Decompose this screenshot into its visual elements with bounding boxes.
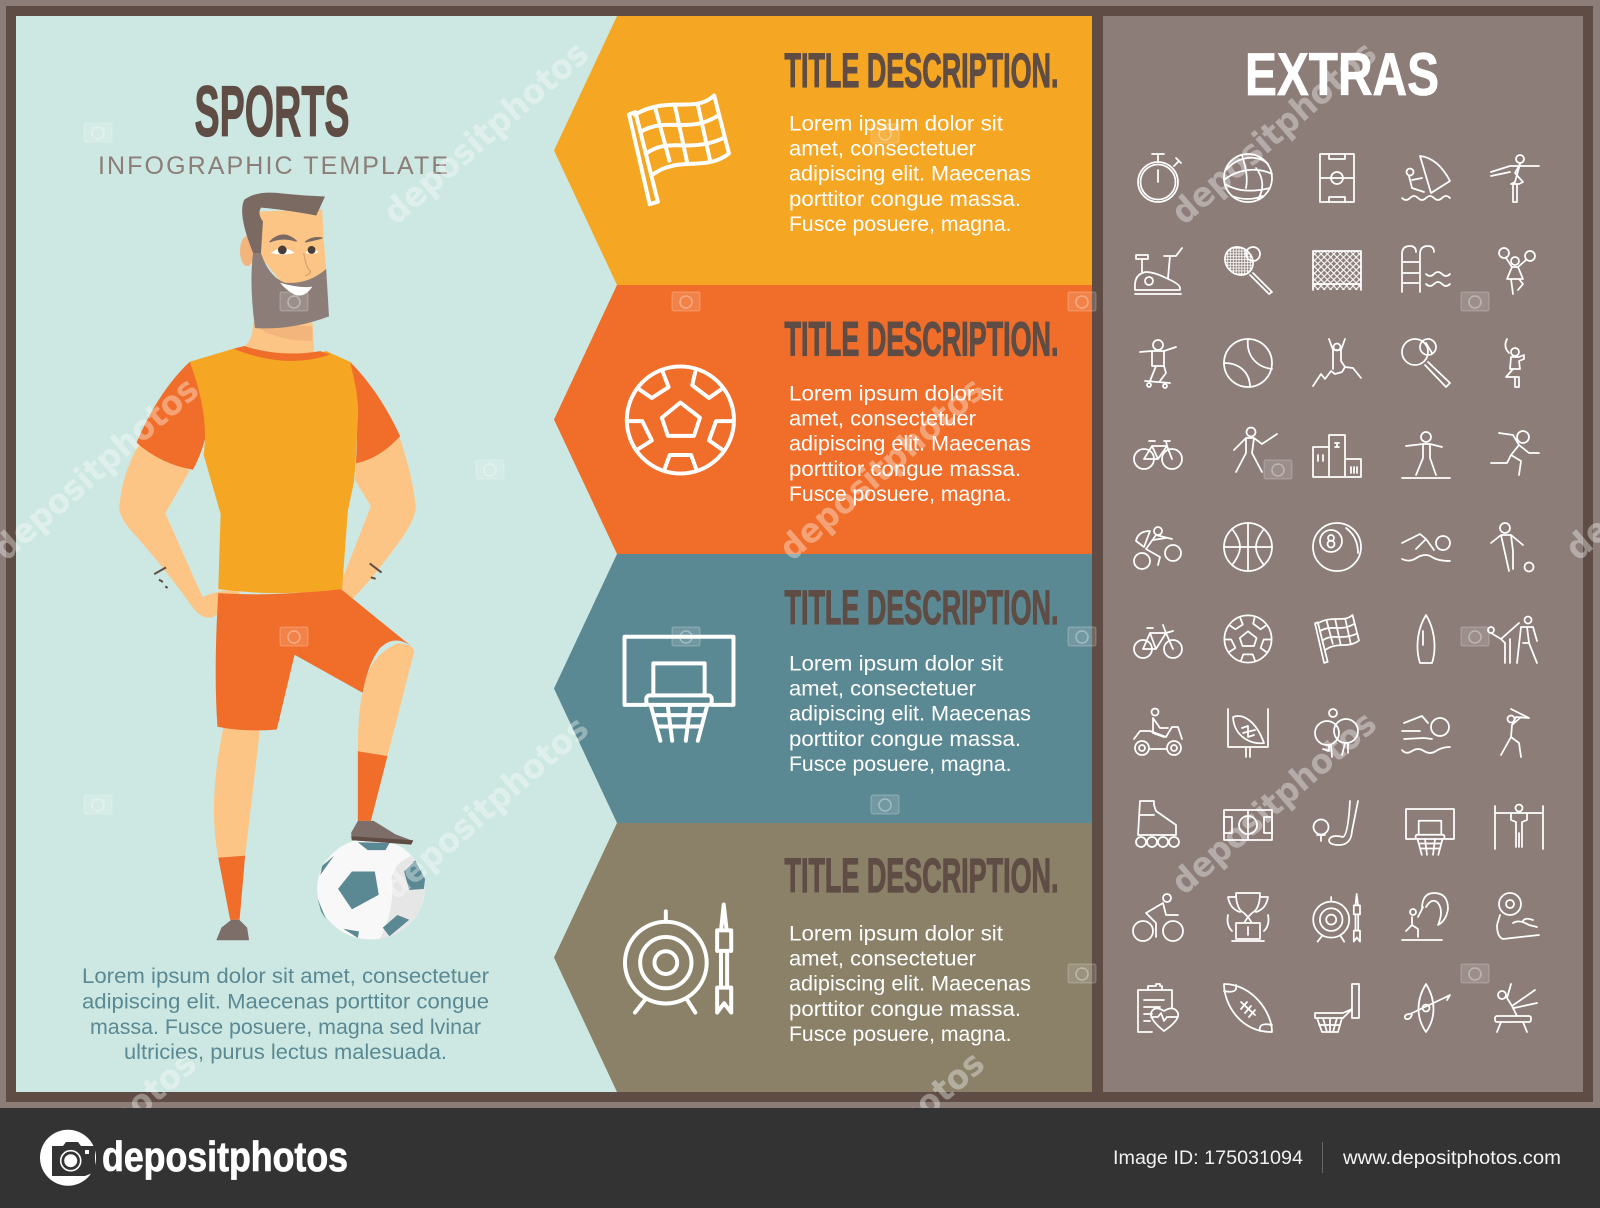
ball [317, 838, 425, 939]
icon: pull up bar athlete [1495, 804, 1543, 849]
text block: porttitor congue massa. [789, 728, 1021, 751]
head [240, 193, 329, 328]
icon: billiard eight ball [1313, 523, 1361, 571]
text block: Lorem ipsum dolor sit [789, 923, 1003, 946]
text block: adipiscing elit. Maecenas [789, 163, 1031, 186]
icon: karate fighters [1488, 616, 1537, 663]
icon: american football [1224, 984, 1272, 1032]
icon: archery target [1313, 894, 1360, 942]
panel: section 4 khaki [554, 823, 1092, 1092]
text block: amet, consectetuer [789, 948, 976, 971]
icon: rollerblade [1136, 801, 1179, 847]
watermarks: depositphotos [1164, 33, 1385, 233]
text block: adipiscing elit. Maecenas [789, 973, 1031, 996]
heading: TITLE DESCRIPTION. [784, 314, 1058, 366]
icon: winners podium [1313, 435, 1361, 477]
neck [244, 322, 314, 354]
icon: basketball hoop [625, 637, 733, 741]
icon: bicycle [1134, 441, 1182, 469]
icon: soccer ball [627, 366, 734, 474]
icon: soccer field horizontal [1224, 810, 1272, 840]
text block: porttitor congue massa. [789, 188, 1021, 211]
watermarks: depositphotos [376, 708, 597, 908]
icon: skateboarder [1140, 340, 1176, 388]
text block [789, 653, 1031, 776]
icon: cheerleader [1499, 248, 1535, 294]
text block: Fusce posuere, magna. [789, 213, 1012, 236]
illustration: football player with ball [119, 193, 425, 940]
icon: football goal [1228, 709, 1268, 757]
description paragraph [82, 964, 489, 1064]
text block: Lorem ipsum dolor sit [789, 383, 1003, 406]
icon: swimmer [1402, 534, 1450, 561]
text block: Fusce posuere, magna. [789, 1023, 1012, 1046]
description paragraph: Lorem ipsum dolor sit amet, consectetuer [82, 964, 489, 988]
panel: section 1 yellow [554, 16, 1092, 285]
icon: mountain cyclist [1134, 527, 1181, 569]
text block: Lorem ipsum dolor sit [789, 113, 1003, 136]
icon: mountain climber [1313, 339, 1361, 386]
icon: ping pong paddles [1315, 709, 1358, 757]
icon: kitesurfer [1402, 893, 1448, 940]
website url: www.depositphotos.com [1342, 1147, 1561, 1169]
text block: adipiscing elit. Maecenas [789, 703, 1031, 726]
panel: section 2 orange [554, 285, 1092, 554]
icon: city bicycle [1134, 625, 1182, 658]
icon: arm with weight [1497, 893, 1539, 939]
icon: gymnast dancer [1505, 339, 1524, 387]
icon: swimming pool ladder [1402, 246, 1450, 292]
panel: left sports hero [16, 16, 656, 1092]
icon: soccer field [1320, 154, 1354, 202]
icon: soccer ball [1224, 615, 1272, 663]
logo: camera badge [40, 1130, 96, 1186]
icon: ballet dancer [1491, 155, 1539, 202]
title: sports: SPORTS [194, 73, 350, 152]
text block [789, 383, 1031, 506]
heading: TITLE DESCRIPTION. [784, 582, 1058, 635]
watermarks: depositphotos [772, 369, 993, 569]
icon: footballer kicking [1491, 523, 1534, 572]
text block [789, 113, 1031, 236]
heading: extras: EXTRAS [1245, 41, 1439, 108]
icon: gymnast on pommel horse [1495, 984, 1537, 1032]
text block: Fusce posuere, magna. [789, 483, 1012, 506]
watermarks: depositphotos [1164, 703, 1385, 903]
icon: tennis ball [1224, 339, 1272, 387]
heading: TITLE DESCRIPTION. [784, 45, 1058, 98]
icon: basketball hoop [1406, 809, 1454, 855]
icon: road cyclist [1133, 894, 1183, 941]
text block: amet, consectetuer [789, 678, 976, 701]
icon: trophy [1228, 893, 1268, 941]
text block: porttitor congue massa. [789, 998, 1021, 1021]
icon: checkered flag [629, 96, 729, 204]
text block: amet, consectetuer [789, 408, 976, 431]
text block: amet, consectetuer [789, 138, 976, 161]
icon: kayak [1405, 984, 1450, 1032]
icon: surfer [1402, 432, 1450, 478]
icon: goal net [1313, 251, 1361, 290]
description paragraph: massa. Fusce posuere, magna sed lvinar [90, 1015, 481, 1039]
text block: Lorem ipsum dolor sit [789, 653, 1003, 676]
logo wordmark: depositphotos [102, 1133, 348, 1180]
icon: medical clipboard [1138, 984, 1178, 1032]
icon: windsurfer [1402, 156, 1450, 200]
panel: extras icons [1103, 16, 1583, 1092]
icon: stopwatch [1138, 154, 1181, 202]
text block [789, 923, 1031, 1046]
watermarks: depositphotos [376, 33, 597, 233]
shirt [136, 346, 400, 593]
icon: checkered flag [1315, 615, 1359, 663]
description paragraph: adipiscing elit. Maecenas porttitor congue [82, 990, 489, 1014]
text block: porttitor congue massa. [789, 458, 1021, 481]
legs [214, 643, 414, 940]
footer bar [0, 1108, 1600, 1208]
icon: surfboard [1418, 615, 1434, 663]
icon: exercise bike [1135, 248, 1182, 294]
icon: table tennis racket [1402, 339, 1450, 387]
icon: quad bike [1134, 708, 1182, 755]
panel: section 3 teal [554, 554, 1092, 823]
icon: volleyball [1224, 154, 1272, 202]
text block: adipiscing elit. Maecenas [789, 433, 1031, 456]
icon: basketball backboard side [1315, 984, 1359, 1032]
subtitle: INFOGRAPHIC TEMPLATE [98, 152, 448, 180]
icon: runner [1491, 431, 1539, 475]
icon: golfer [1501, 709, 1529, 757]
heading: TITLE DESCRIPTION. [784, 850, 1058, 903]
image id: Image ID: 175031094 [1113, 1147, 1303, 1169]
icon: basketball [1224, 523, 1272, 571]
icon: tennis racket with ball [1219, 241, 1272, 294]
text block: Fusce posuere, magna. [789, 753, 1012, 776]
icon: swimmer in waves [1402, 716, 1450, 753]
icon: archery target [625, 905, 731, 1013]
icon: golf club and ball [1314, 801, 1358, 845]
description paragraph: ultricies, purus lectus malesuada. [124, 1040, 447, 1064]
arms [119, 437, 416, 618]
shorts [216, 588, 414, 730]
icon: fencer [1234, 428, 1277, 472]
